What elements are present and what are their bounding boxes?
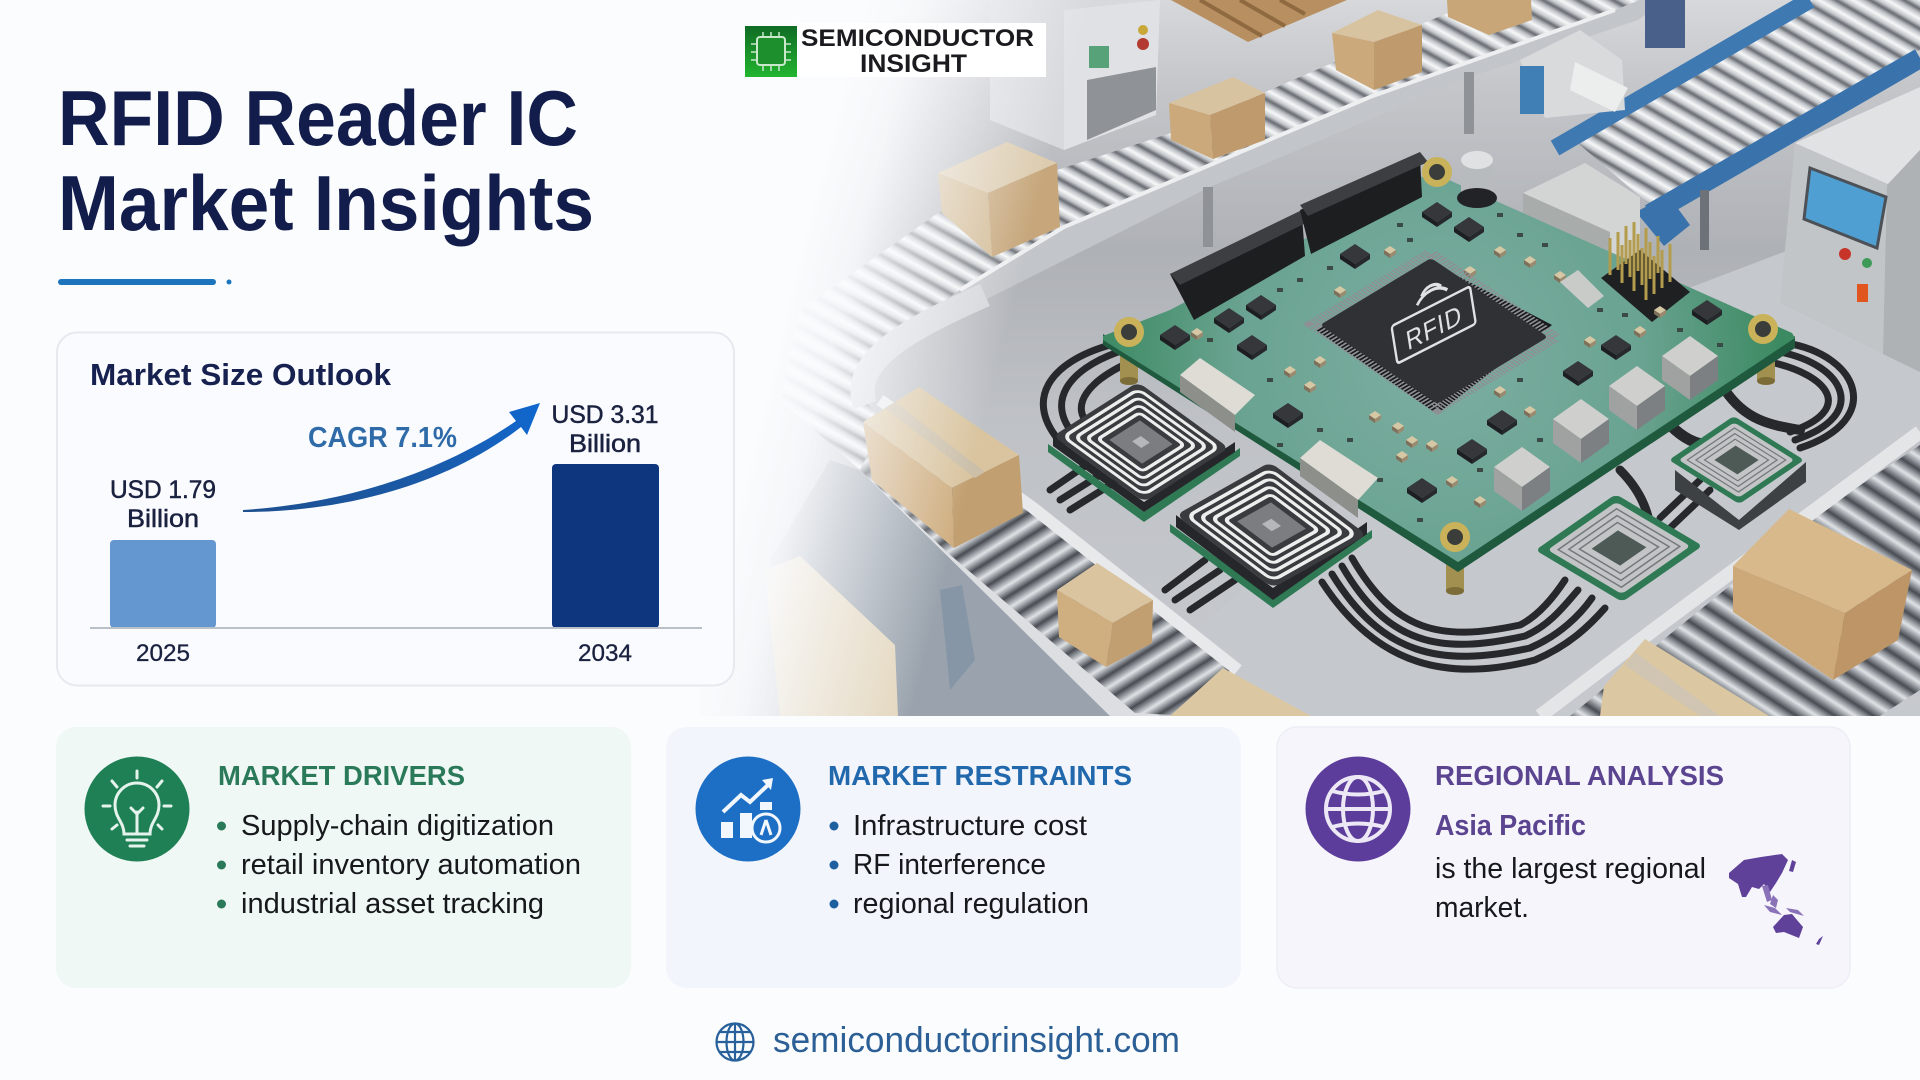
factory floor bbox=[700, 0, 1920, 716]
board legs bbox=[1120, 345, 1775, 595]
cables bbox=[1043, 343, 1854, 669]
pallet bbox=[1171, 0, 1347, 42]
value label 2025: USD 1.79 bbox=[110, 476, 216, 504]
main RFID chip bbox=[1313, 254, 1555, 414]
header connector left bbox=[1170, 210, 1312, 320]
title: Market Insights bbox=[58, 159, 594, 247]
capacitor bbox=[1457, 151, 1497, 208]
axis bbox=[90, 627, 702, 629]
box 4 bbox=[1447, 0, 1532, 35]
panel heading: Market Size Outlook bbox=[90, 357, 392, 392]
white fade left and bottom edge bbox=[690, 0, 1920, 722]
logo icon: chip bbox=[745, 26, 797, 77]
title bbox=[58, 74, 594, 247]
bullet list: Supply-chain digitization bbox=[241, 810, 554, 842]
panel: market size outlook bbox=[57, 332, 734, 686]
bullet list: regional regulation bbox=[853, 888, 1089, 920]
header connector right bbox=[1300, 152, 1428, 254]
logo wordmark: SEMICONDUCTOR bbox=[801, 25, 1034, 52]
small ICs bbox=[1160, 202, 1722, 503]
value label 2034 bbox=[552, 401, 658, 458]
hero illustration: RFID board on conveyor lines bbox=[690, 0, 1920, 722]
big right box bbox=[1733, 509, 1912, 680]
control cabinet bbox=[1780, 87, 1920, 372]
footer website bbox=[716, 1019, 1180, 1060]
year labels: 2025 bbox=[136, 640, 190, 667]
panel: market drivers bbox=[56, 727, 631, 988]
lower-left conveyor bbox=[765, 387, 1311, 716]
year labels: 2034 bbox=[578, 640, 632, 667]
RFID label: RFID bbox=[1404, 300, 1464, 357]
pin header bbox=[1601, 222, 1690, 322]
scanner gate machine bbox=[990, 0, 1160, 150]
value label 2025 bbox=[110, 476, 216, 533]
box 3 bbox=[1332, 10, 1422, 90]
box 2 bbox=[1169, 77, 1265, 159]
heading: MARKET RESTRAINTS bbox=[828, 760, 1132, 791]
flat connectors bbox=[1180, 358, 1378, 518]
bar 2034 bbox=[552, 464, 659, 628]
region description bbox=[1435, 853, 1706, 924]
region description: market. bbox=[1435, 892, 1529, 924]
circuit board bbox=[1103, 151, 1795, 572]
website address: semiconductorinsight.com bbox=[773, 1019, 1180, 1060]
upper conveyor with boxes bbox=[780, 0, 1665, 470]
bullet list: RF interference bbox=[853, 849, 1046, 881]
region description: is the largest regional bbox=[1435, 853, 1706, 885]
bar 2025 bbox=[110, 540, 216, 628]
value label 2034: USD 3.31 bbox=[552, 401, 658, 429]
small box bbox=[1057, 563, 1153, 667]
value label 2034: Billion bbox=[569, 430, 641, 458]
title underline accent bbox=[58, 279, 232, 285]
year labels bbox=[136, 640, 632, 667]
icon: globe bbox=[1306, 756, 1410, 862]
bullet list: Infrastructure cost bbox=[853, 810, 1087, 842]
faint lower box bbox=[765, 556, 898, 716]
back column bbox=[1645, 0, 1685, 48]
panel: market restraints bbox=[666, 727, 1241, 988]
mounting holes bbox=[1114, 157, 1778, 552]
bullet list bbox=[830, 810, 1089, 920]
logo bbox=[745, 23, 1046, 78]
logo wordmark bbox=[801, 25, 1034, 78]
box 1 bbox=[938, 142, 1060, 257]
icon: chart bbox=[696, 756, 800, 862]
large box bbox=[863, 387, 1023, 548]
icon: footer globe bbox=[716, 1024, 754, 1060]
antenna modules bbox=[1048, 382, 1806, 608]
heading: MARKET DRIVERS bbox=[218, 760, 465, 791]
region name: Asia Pacific bbox=[1435, 810, 1586, 842]
RFID label bbox=[1388, 267, 1476, 364]
passive components bbox=[1191, 213, 1723, 522]
title: RFID Reader IC bbox=[58, 74, 578, 162]
inclined blue conveyor bbox=[1555, 0, 1920, 250]
CAGR label: CAGR 7.1% bbox=[308, 422, 457, 454]
lower-right conveyor bbox=[1540, 432, 1920, 716]
silver ports bbox=[1494, 336, 1718, 511]
floor highlight lower right bbox=[1100, 200, 1920, 716]
bullet list: retail inventory automation bbox=[241, 849, 581, 881]
panel: regional analysis bbox=[1277, 727, 1850, 988]
cabinet screen bbox=[1804, 168, 1886, 248]
CAGR arrow bbox=[243, 403, 540, 512]
logo wordmark: INSIGHT bbox=[860, 50, 967, 78]
metal block and motor bbox=[1520, 30, 1640, 285]
bullet list bbox=[217, 810, 581, 920]
icon: light bulb bbox=[84, 756, 190, 862]
heading: REGIONAL ANALYSIS bbox=[1435, 760, 1724, 791]
crystal bbox=[1560, 270, 1604, 308]
value label 2025: Billion bbox=[127, 505, 199, 533]
bullet list: industrial asset tracking bbox=[241, 888, 544, 920]
map: Asia Pacific bbox=[1729, 854, 1823, 945]
